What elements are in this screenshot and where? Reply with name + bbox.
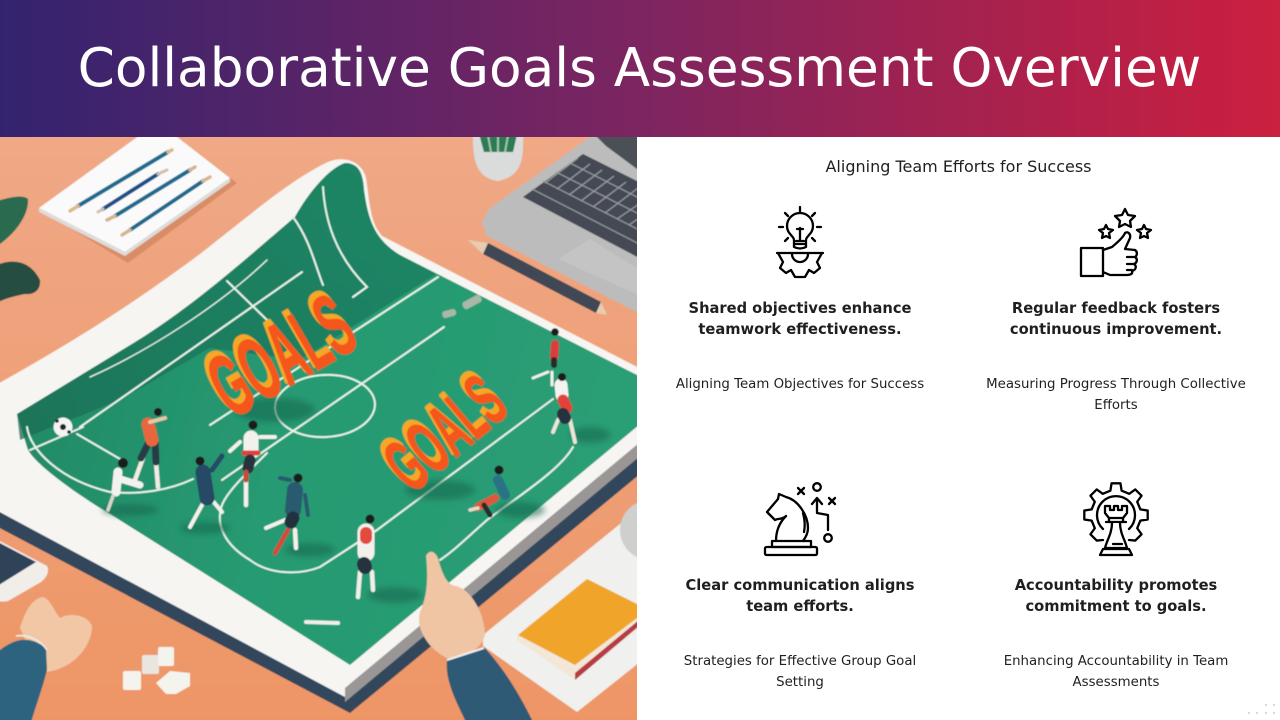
heading: accountability: Accountability promotes bbox=[1015, 577, 1217, 594]
player 4 bbox=[230, 420, 275, 505]
right hand and sleeve bbox=[419, 552, 535, 720]
text: group goal setting: Setting bbox=[776, 675, 824, 690]
text: measuring progress: Efforts bbox=[1094, 398, 1138, 413]
title: Collaborative Goals Assessment Overview bbox=[78, 37, 1201, 99]
player 6 bbox=[358, 514, 374, 597]
book bbox=[517, 579, 645, 680]
icon: lightbulb over gear bbox=[776, 206, 824, 278]
chalk bbox=[306, 622, 338, 623]
tray bbox=[483, 505, 645, 712]
left hand and sleeve bbox=[0, 597, 92, 720]
GOALS lettering small: GOALS bbox=[364, 355, 519, 504]
text: group goal setting: Strategies for Effective Group Goal bbox=[684, 654, 916, 669]
player 1 bbox=[135, 408, 165, 487]
laptop bbox=[482, 130, 645, 316]
GOALS lettering small bbox=[364, 355, 523, 508]
sugar cubes bbox=[123, 647, 190, 694]
phone bbox=[0, 538, 48, 602]
text: measuring progress: Measuring Progress Through Collective bbox=[986, 377, 1246, 392]
text: enhancing accountability: Enhancing Accountability in Team bbox=[1004, 654, 1228, 669]
icon: thumbs up with stars bbox=[1080, 208, 1152, 278]
panel heading: Aligning Team Efforts for Success bbox=[825, 157, 1092, 176]
ball bbox=[54, 418, 72, 436]
coffee cup bbox=[620, 500, 680, 560]
heading: regular feedback: continuous improvement. bbox=[1010, 321, 1222, 338]
player 2 bbox=[108, 458, 140, 510]
GOALS lettering small: GOALS bbox=[368, 359, 523, 508]
text: enhancing accountability bbox=[1004, 654, 1228, 690]
heading: clear communication bbox=[686, 577, 914, 615]
heading: clear communication: Clear communication aligns bbox=[686, 577, 914, 594]
plant leaves bbox=[0, 197, 40, 304]
player 7 seated bbox=[470, 466, 505, 515]
heading: regular feedback: Regular feedback fosters bbox=[1012, 300, 1220, 317]
board base bbox=[0, 442, 645, 713]
heading: clear communication: team efforts. bbox=[746, 598, 854, 615]
field scribble marks bbox=[441, 294, 483, 319]
player 3 bbox=[190, 456, 222, 527]
heading: accountability bbox=[1014, 577, 1217, 615]
text: enhancing accountability: Assessments bbox=[1073, 675, 1159, 690]
icon: chess knight with play arrows bbox=[764, 482, 836, 556]
text: group goal setting bbox=[684, 654, 916, 690]
GOALS lettering large bbox=[188, 272, 372, 437]
player 9 bbox=[553, 373, 575, 442]
player 8 bbox=[533, 328, 559, 385]
illustration: goals board on a desk bbox=[0, 137, 637, 720]
field lines bbox=[27, 187, 573, 572]
white board sheet bbox=[0, 159, 645, 697]
desk background bbox=[0, 117, 657, 720]
header banner bbox=[0, 0, 1280, 137]
plant pot bbox=[473, 130, 523, 181]
text: aligning team objectives: Aligning Team Objectives for Success bbox=[676, 377, 924, 392]
heading: shared objectives: teamwork effectiveness. bbox=[698, 321, 902, 338]
player 5 bbox=[266, 474, 308, 553]
heading: shared objectives bbox=[689, 300, 911, 338]
icon: rook inside gear bbox=[1083, 482, 1149, 556]
GOALS lettering large: GOALS bbox=[188, 272, 368, 433]
ground shadows bbox=[102, 398, 610, 603]
heading: shared objectives: Shared objectives enhance bbox=[689, 300, 911, 317]
watermark dots bbox=[1248, 704, 1275, 714]
notepad with pencils bbox=[39, 130, 237, 263]
text: measuring progress bbox=[986, 377, 1246, 413]
heading: accountability: commitment to goals. bbox=[1025, 598, 1207, 615]
green field bbox=[17, 163, 645, 665]
GOALS lettering large: GOALS bbox=[192, 276, 372, 437]
heading: regular feedback bbox=[1010, 300, 1222, 338]
pen bbox=[468, 240, 607, 315]
